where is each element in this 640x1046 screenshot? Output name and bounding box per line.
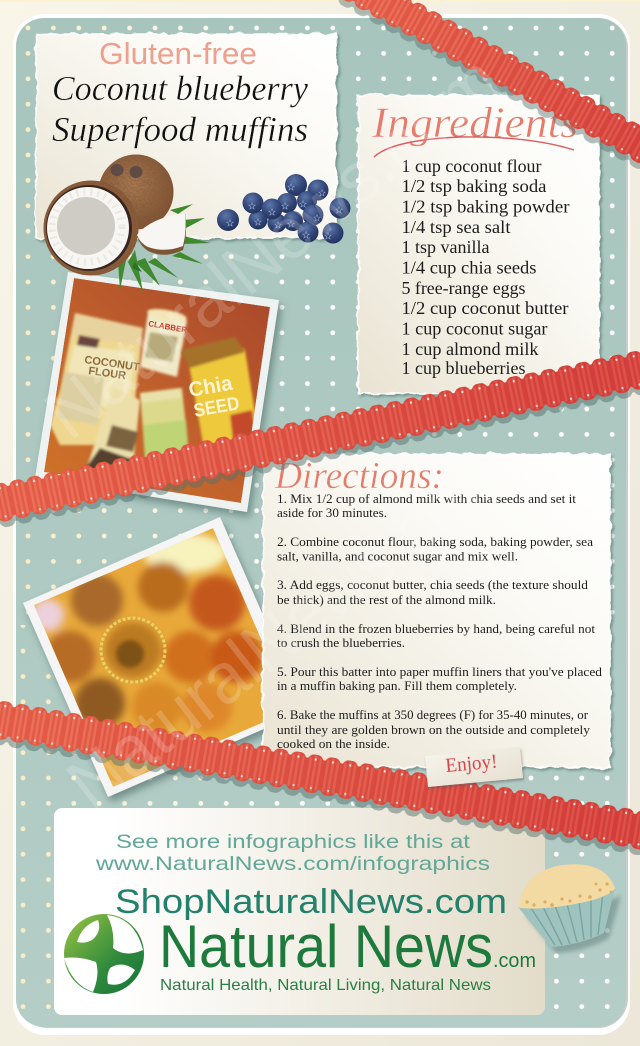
illustration: coconuts and palm leaves xyxy=(44,154,210,292)
panel: ingredients card xyxy=(358,95,599,393)
footer background xyxy=(54,808,545,1015)
directions steps: 6. Bake the muffins at 350 degrees (F) for 35-40 minutes, or xyxy=(277,707,589,722)
logo .com: .com xyxy=(493,950,536,972)
directions steps: in a muffin baking pan. Fill them completely. xyxy=(277,678,517,693)
baking powder can xyxy=(140,307,188,377)
illustration: blueberries xyxy=(217,174,350,244)
logo tagline: Natural Health, Natural Living, Natural News xyxy=(160,977,491,994)
ribbon: lower xyxy=(0,694,640,860)
palm leaves xyxy=(118,204,210,292)
heading underline xyxy=(374,137,574,157)
title: Superfood muffins: Superfood muffins xyxy=(52,110,308,149)
photo: recipe ingredients polaroid xyxy=(35,272,279,512)
watermark: upper: NaturalNews.com xyxy=(30,40,515,454)
watermark: lower: NaturalNews.com xyxy=(53,429,527,825)
callout: Enjoy tag: Enjoy! xyxy=(445,751,498,777)
muffin top xyxy=(519,864,615,909)
muffin crumbs xyxy=(525,882,612,907)
ribbon: middle xyxy=(0,345,640,536)
heading: Directions: Directions: xyxy=(274,455,444,497)
directions steps: salt, vanilla, and coconut sugar and mix well. xyxy=(277,548,518,564)
photo: baked muffins polaroid xyxy=(23,517,264,804)
shop url: ShopNaturalNews.com xyxy=(115,883,507,921)
panel: footer card xyxy=(54,808,545,1015)
directions steps: 3. Add eggs, coconut butter, chia seeds (the texture should xyxy=(277,577,589,592)
half coconut shell xyxy=(44,180,138,276)
directions steps: cooked on the inside. xyxy=(277,736,390,751)
illustration: muffin xyxy=(518,864,621,953)
directions paper xyxy=(263,454,610,767)
middle packet xyxy=(86,388,141,468)
flour label text: COCONUT xyxy=(84,354,141,374)
center muffin xyxy=(101,618,165,682)
logo globe xyxy=(64,914,144,994)
directions steps: be thick) and the rest of the almond milk. xyxy=(277,592,496,607)
promo line 2: www.NaturalNews.com/infographics xyxy=(95,853,490,875)
half coconut rim xyxy=(46,185,132,271)
half coconut flesh xyxy=(47,187,129,269)
top edge tint xyxy=(0,0,640,2)
ingredient list: 1/2 tsp baking soda xyxy=(402,176,547,196)
directions steps: until they are golden brown on the outside and completely xyxy=(277,722,591,737)
directions steps: 5. Pour this batter into paper muffin liners that you've placed xyxy=(277,664,603,679)
callout: Enjoy tag xyxy=(425,747,523,787)
directions steps: 2. Combine coconut flour, baking soda, baking powder, sea xyxy=(277,534,593,549)
muffin shadow xyxy=(525,896,621,953)
photo frame xyxy=(35,272,279,512)
half coconut hollow xyxy=(57,197,115,255)
coconut oil jar xyxy=(138,386,190,458)
ingredient list: 1 tsp vanilla xyxy=(402,237,490,257)
heading: Ingredients: Ingredients xyxy=(371,100,578,147)
cup pleats xyxy=(531,893,603,945)
chia bag xyxy=(178,336,256,444)
directions steps: 4. Blend in the frozen blueberries by hand, being careful not xyxy=(277,621,595,636)
center muffin crumb xyxy=(116,640,144,668)
ribbon: top right xyxy=(338,0,640,169)
panel: title card xyxy=(36,34,336,238)
coconut eyes xyxy=(110,164,124,176)
title card paper xyxy=(36,34,336,238)
logo wordmark: Natural News xyxy=(159,913,493,980)
coconut wedge xyxy=(137,213,186,255)
promo line 1: See more infographics like this at xyxy=(116,831,471,853)
ingredient list: 1/4 cup chia seeds xyxy=(402,258,536,278)
title: Gluten-free: Gluten-free xyxy=(99,36,257,71)
chia label text: Chia xyxy=(187,372,234,402)
photo scene xyxy=(44,278,270,505)
ingredient list: 1/4 tsp sea salt xyxy=(402,217,510,237)
directions steps: 1. Mix 1/2 cup of almond milk with chia seeds and set it xyxy=(277,491,576,506)
flesh pleats xyxy=(52,192,122,262)
panel: directions card xyxy=(263,454,610,767)
directions steps: aside for 30 minutes. xyxy=(277,505,387,520)
ingredient list: 1/2 cup coconut butter xyxy=(402,298,568,318)
ingredient list: 1 cup coconut flour xyxy=(402,156,542,176)
directions steps xyxy=(277,491,603,751)
seed label text: SEED xyxy=(192,393,241,422)
flour bag xyxy=(50,313,143,445)
muffin cup xyxy=(518,888,615,947)
ingredient list: 1/2 tsp baking powder xyxy=(402,196,570,216)
ingredient list: 1 cup blueberries xyxy=(402,358,526,378)
ingredient list: 1 cup coconut sugar xyxy=(402,318,548,338)
can label text: CLABBER xyxy=(148,319,188,335)
ingredient list: 5 free-range eggs xyxy=(402,278,526,298)
ingredient list xyxy=(402,156,570,378)
ingredient list: 1 cup almond milk xyxy=(402,339,538,359)
photo frame xyxy=(23,517,305,797)
flour label text 2: FLOUR xyxy=(88,365,127,382)
whole coconut xyxy=(98,154,174,230)
blurred muffins xyxy=(34,528,263,787)
title: Coconut blueberry: Coconut blueberry xyxy=(52,69,308,108)
directions steps: to crush the blueberries. xyxy=(277,635,405,650)
ingredients paper xyxy=(358,95,599,393)
